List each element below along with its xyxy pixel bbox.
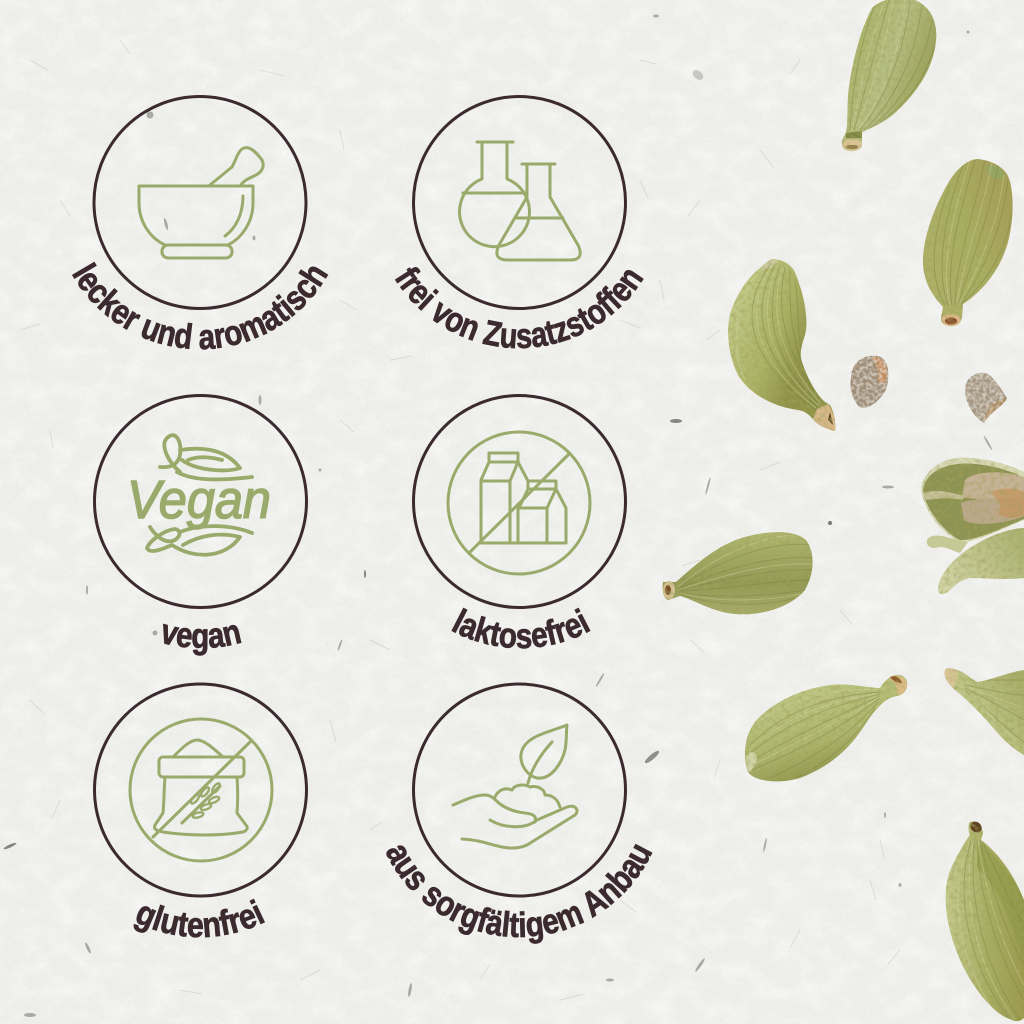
cardamom pod: bottom right xyxy=(946,819,1024,1021)
cardamom stem fragment xyxy=(927,536,968,553)
badge: laktosefrei xyxy=(412,394,627,649)
icon: lab flasks xyxy=(460,142,580,260)
badge: glutenfrei xyxy=(93,682,308,938)
label: vegan: vegan xyxy=(163,624,242,656)
icon: crossed-out flour sack xyxy=(130,719,272,861)
label: glutenfrei: glutenfrei xyxy=(134,898,265,938)
badge: aus sorgfältigem Anbau xyxy=(386,682,652,944)
cardamom pod: curved left xyxy=(728,259,835,431)
cardamom seed: left xyxy=(850,356,888,408)
badge: vegan xyxy=(93,394,308,656)
icon: mortar and pestle xyxy=(139,148,263,258)
cardamom seed: right xyxy=(965,373,1007,423)
cardamom pod: left horizontal xyxy=(663,532,813,614)
cardamom pod: right middle xyxy=(945,668,1024,755)
badge: frei von Zusatzstoffen xyxy=(394,95,644,349)
label: laktosefrei: laktosefrei xyxy=(451,608,590,649)
icon: crossed-out milk cartons xyxy=(448,432,590,574)
icon: vegan lettering with leaves xyxy=(127,435,271,555)
cardamom pod: upper right xyxy=(923,159,1013,326)
label: lecker und aromatisch: lecker und aromatisch xyxy=(72,262,328,350)
cardamom pod: shell fragment xyxy=(938,528,1024,594)
icon: vegan lettering with leaves: Vegan xyxy=(127,470,271,530)
badge: lecker und aromatisch xyxy=(72,95,328,350)
label: frei von Zusatzstoffen: frei von Zusatzstoffen xyxy=(394,267,644,349)
icon: hand with seedling xyxy=(453,725,577,848)
cardamom pod: lower middle xyxy=(745,675,907,781)
cardamom pod: open with seeds xyxy=(921,458,1024,542)
label: aus sorgfältigem Anbau: aus sorgfältigem Anbau xyxy=(386,844,652,944)
cardamom pod: top xyxy=(842,0,936,151)
